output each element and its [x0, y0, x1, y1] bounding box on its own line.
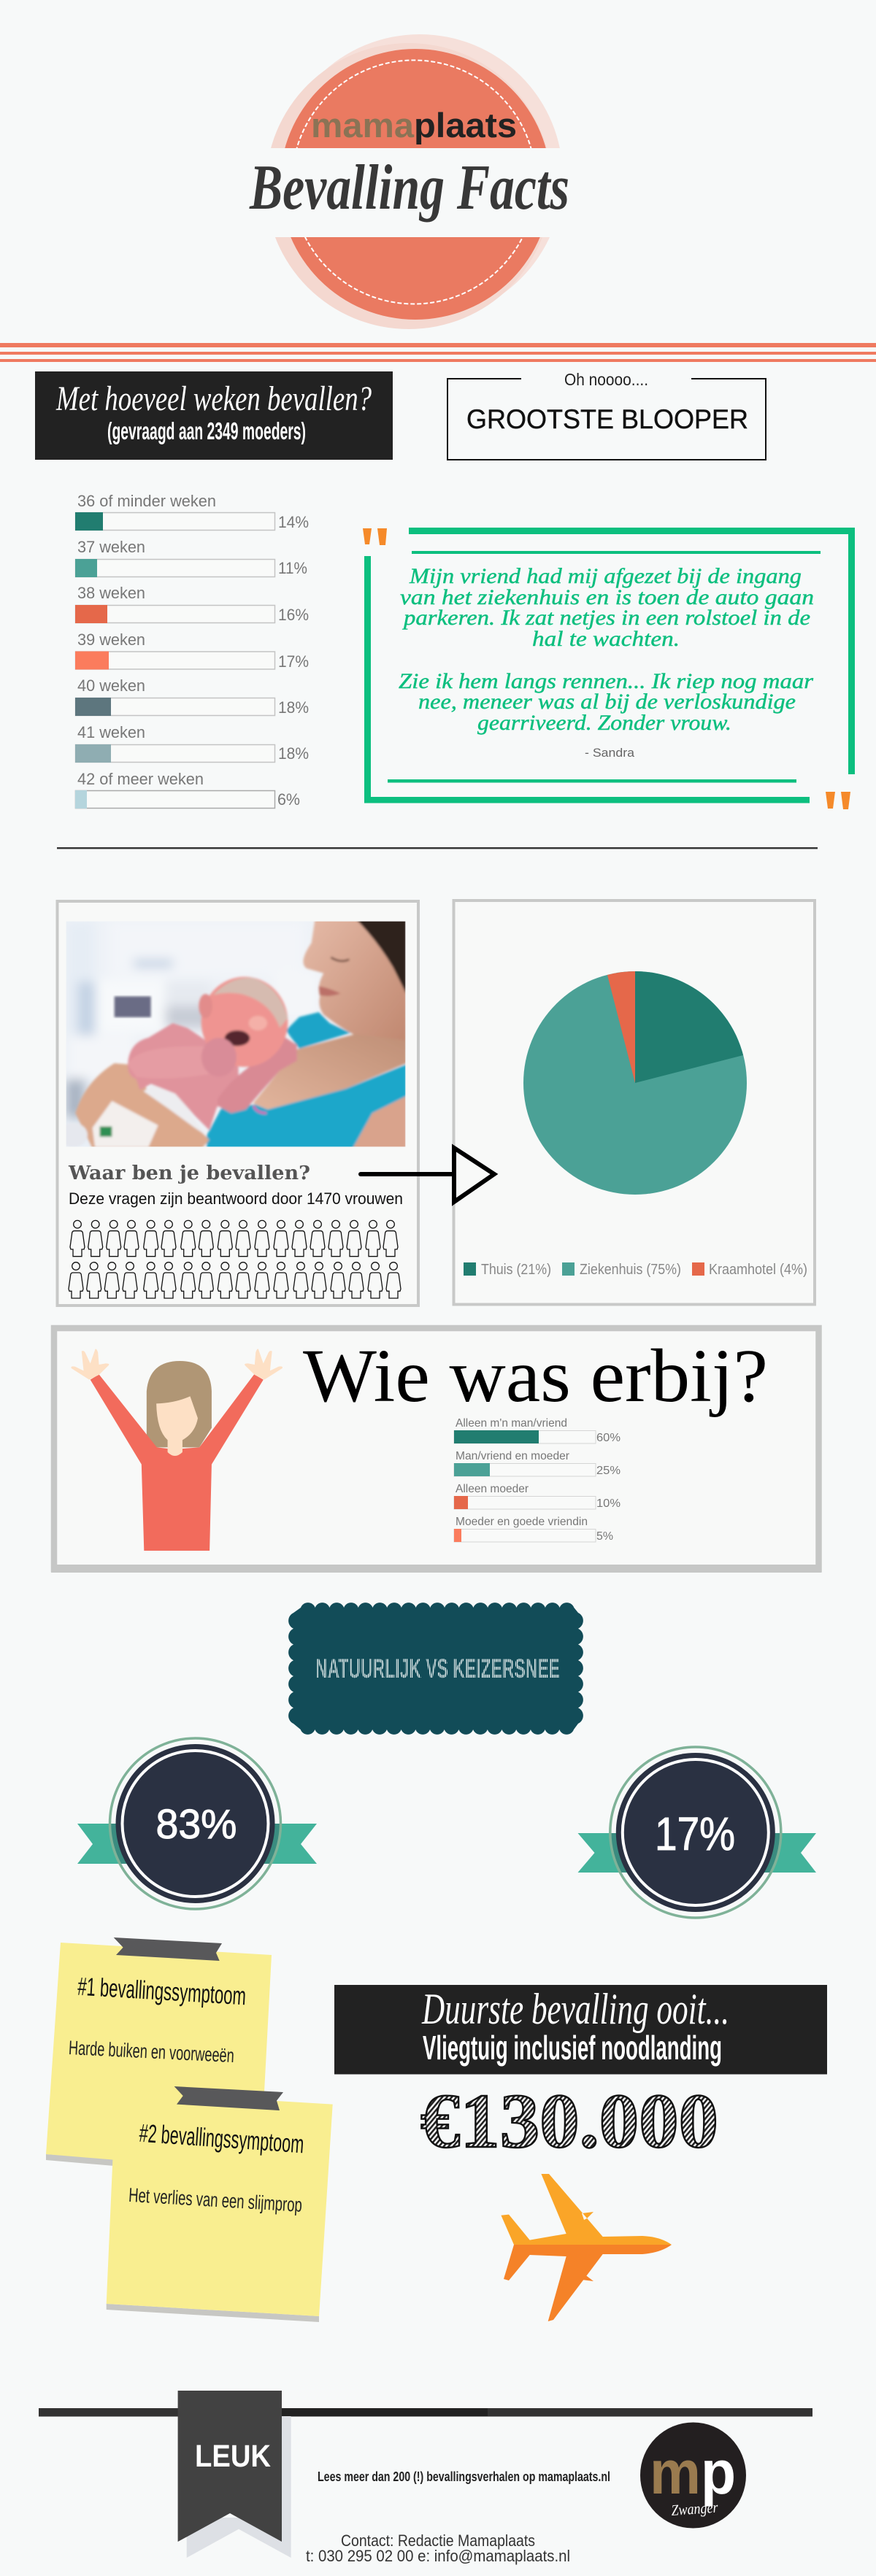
- contact: [306, 2531, 570, 2565]
- tape: [174, 2086, 283, 2110]
- bar chart: who was present: 10%: [596, 1497, 620, 1510]
- sticky note 1: [46, 1937, 272, 2166]
- note 2 heading: #2 bevallingssymptoom: [138, 2119, 305, 2159]
- badge: 83%: [77, 1738, 317, 1909]
- arrow: [361, 1148, 494, 1202]
- illustration: woman with raised arms: [71, 1349, 283, 1551]
- bar chart: weeks: 38 weken: [77, 584, 145, 602]
- quote text: Mijn vriend had mij afgezet bij de ingang: [409, 564, 802, 588]
- bar chart: weeks: 36 of minder weken: [77, 492, 216, 510]
- heading: wie was erbij: Wie was erbij?: [303, 1334, 768, 1418]
- bar chart: who was present: 60%: [596, 1432, 620, 1444]
- bar chart: who was present: Alleen moeder: [456, 1483, 529, 1495]
- panel: weeks heading: Met hoeveel weken bevallen?: [55, 379, 372, 418]
- badge: 17%: [578, 1747, 816, 1918]
- footer bar: [39, 2408, 812, 2417]
- legend: Thuis (21%): [481, 1262, 551, 1278]
- quote text: gearriveerd. Zonder vrouw.: [477, 711, 731, 735]
- logo: mp zwanger: [640, 2423, 746, 2528]
- caption: Deze vragen zijn beantwoord door 1470 vrouwen: [69, 1189, 403, 1208]
- contact: t: 030 295 02 00 e: info@mamaplaats.nl: [306, 2547, 570, 2565]
- bar chart: weeks: 41 weken: [77, 723, 145, 741]
- icon: quote mark close: [826, 792, 850, 809]
- scalloped banner: natuurlijk vs keizersnee: [288, 1603, 583, 1735]
- bar chart: who was present: Moeder en goede vriendin: [456, 1516, 588, 1528]
- logo: mp zwanger: mp: [650, 2438, 736, 2507]
- legend: Kraamhotel (4%): [709, 1262, 807, 1278]
- panel: blooper heading: Oh noooo....: [564, 370, 648, 389]
- bar chart: weeks: 11%: [278, 559, 307, 577]
- icon rows: women: [69, 1220, 401, 1298]
- stripes divider: [0, 343, 876, 362]
- panel: wie was erbij: [51, 1328, 822, 1573]
- bar chart: weeks: 40 weken: [77, 676, 145, 695]
- legend: [464, 1262, 807, 1278]
- scalloped banner: natuurlijk vs keizersnee: NATUURLIJK VS KEIZERSNEE: [315, 1654, 560, 1684]
- note 1 heading: #1 bevallingssymptoom: [77, 1973, 247, 2010]
- quote text: hal te wachten.: [532, 627, 680, 651]
- bar chart: weeks: 39 weken: [77, 630, 145, 649]
- brand name: mamaplaats: [311, 106, 517, 144]
- legend: Ziekenhuis (75%): [580, 1262, 681, 1278]
- bar chart: who was present: Man/vriend en moeder: [456, 1450, 570, 1462]
- tape: [114, 1937, 222, 1961]
- photo: mother and newborn: [58, 919, 407, 1149]
- sticky note 2: [107, 2086, 333, 2322]
- panel: where did you give birth: [57, 901, 418, 1306]
- quote text: [399, 564, 814, 735]
- quote text: parkeren. Ik zat netjes in een rolstoel in de: [402, 606, 810, 630]
- bar chart: who was present: 5%: [596, 1530, 613, 1543]
- icon: quote mark open: [363, 528, 387, 545]
- quote text: nee, meneer was al bij de verloskundige: [418, 690, 796, 714]
- note 2 text: Het verlies van een slijmprop: [128, 2184, 303, 2216]
- panel: blooper heading: GROOTSTE BLOOPER: [466, 404, 748, 434]
- quote text: van het ziekenhuis en is toen de auto gaan: [400, 585, 814, 609]
- bar chart: weeks: 6%: [277, 790, 300, 809]
- badge: 17%: 17%: [655, 1808, 735, 1860]
- bar chart: who was present: Alleen m'n man/vriend: [456, 1417, 567, 1430]
- panel: weeks heading: (gevraagd aan 2349 moeders): [107, 417, 306, 444]
- panel: pie chart: [454, 901, 815, 1305]
- contact: Contact: Redactie Mamaplaats: [341, 2531, 535, 2550]
- bar chart: weeks: 18%: [278, 744, 309, 763]
- badge: 83%: 83%: [156, 1801, 237, 1848]
- bar chart: weeks: 42 of meer weken: [77, 770, 204, 788]
- heading: waar ben je bevallen: Waar ben je bevallen?: [68, 1162, 310, 1184]
- bar chart: weeks: [75, 492, 309, 809]
- ribbon: leuk: [178, 2391, 291, 2558]
- bar chart: weeks: 17%: [278, 652, 309, 671]
- panel: weeks heading: [35, 371, 393, 460]
- panel: duurste bevalling heading: Duurste bevalling ooit...: [421, 1985, 729, 2033]
- note 1 text: Harde buiken en voorweeën: [68, 2037, 235, 2067]
- pie chart: [523, 971, 747, 1195]
- quote text: Zie ik hem langs rennen... Ik riep nog maar: [399, 669, 813, 693]
- call to action: Lees meer dan 200 (!) bevallingsverhalen op mamaplaats.nl: [318, 2469, 610, 2484]
- logo: mp zwanger: Zwanger: [671, 2499, 719, 2519]
- section divider: [57, 847, 818, 849]
- header logo badge: [263, 34, 566, 329]
- panel: blooper heading: [447, 370, 766, 460]
- panel: duurste bevalling heading: [334, 1985, 827, 2074]
- panel: blooper quote frame: [364, 528, 855, 803]
- bar chart: weeks: 16%: [278, 606, 309, 624]
- quote attribution: - Sandra: [585, 746, 635, 760]
- ribbon: leuk: LEUK: [195, 2439, 271, 2474]
- bar chart: weeks: 14%: [278, 513, 309, 531]
- bar chart: who was present: [454, 1417, 620, 1543]
- title: Bevalling Facts: [249, 153, 569, 223]
- bar chart: weeks: 18%: [278, 698, 309, 717]
- bar chart: weeks: 37 weken: [77, 538, 145, 556]
- price: €130.000: [420, 2078, 718, 2164]
- bar chart: who was present: 25%: [596, 1465, 620, 1477]
- icon: airplane: [501, 2174, 672, 2321]
